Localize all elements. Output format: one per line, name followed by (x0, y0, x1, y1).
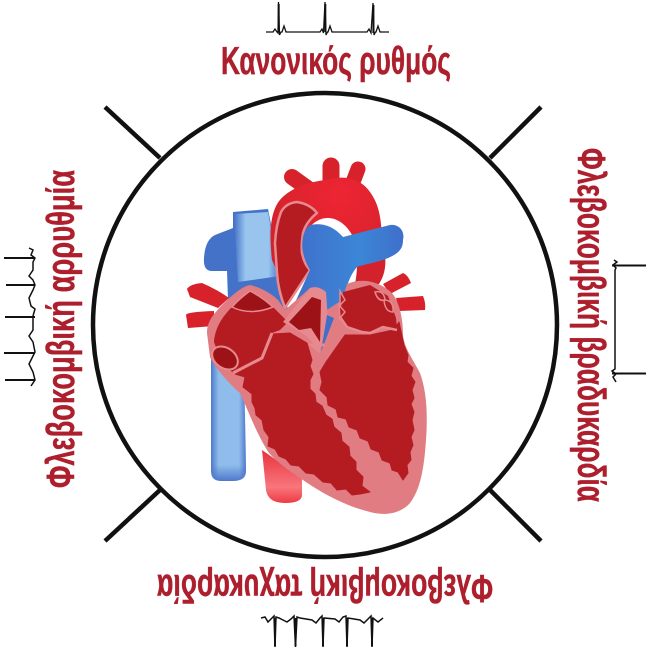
valve: tricuspid (208, 342, 242, 374)
vessel: inferior vena cava shade (211, 465, 246, 481)
ECG: sinus bradycardia (612, 260, 646, 382)
chamber: right atrium upper (232, 291, 273, 312)
valve: mitral chamber inner (289, 297, 321, 342)
vessels: aortic arch branches (292, 166, 358, 190)
tick marks (105, 107, 541, 541)
label: sinus arrhythmia: Φλεβοκομβική αρρυθμία (40, 170, 83, 488)
ring: circle frame (93, 93, 557, 557)
chamber: left ventricle (320, 322, 415, 480)
heart body (207, 281, 427, 514)
valves: pulmonary veins (233, 291, 397, 373)
vessel: aortic arch (271, 178, 385, 300)
chamber: right ventricle (235, 333, 370, 495)
vessel: inferior vena cava (211, 350, 246, 481)
chamber: right atrium (214, 292, 288, 373)
vessel: descending aorta (262, 450, 302, 503)
vessel: pulmonary artery (293, 224, 403, 352)
ECG: sinus arrhythmia (4, 248, 35, 386)
vessel: superior vena cava highlight (234, 212, 280, 282)
ECG: normal rhythm (266, 2, 389, 35)
vessel: superior vena cava (204, 209, 290, 320)
ECG: sinus tachycardia (261, 616, 383, 647)
title: normal rhythm: Κανονικός ρυθμός (221, 40, 451, 83)
heart illustration (186, 166, 427, 514)
vessels: left branches (186, 283, 229, 328)
vessels: right branches (383, 273, 425, 311)
vessel: pulmonary trunk (275, 202, 317, 308)
chamber: left atrium (340, 285, 397, 333)
vessel: pulmonary tip (321, 315, 334, 352)
valve: mitral chamber (283, 287, 328, 350)
label: sinus tachycardia: Φλεβοκομβική ταχυκαρδία (157, 566, 493, 609)
